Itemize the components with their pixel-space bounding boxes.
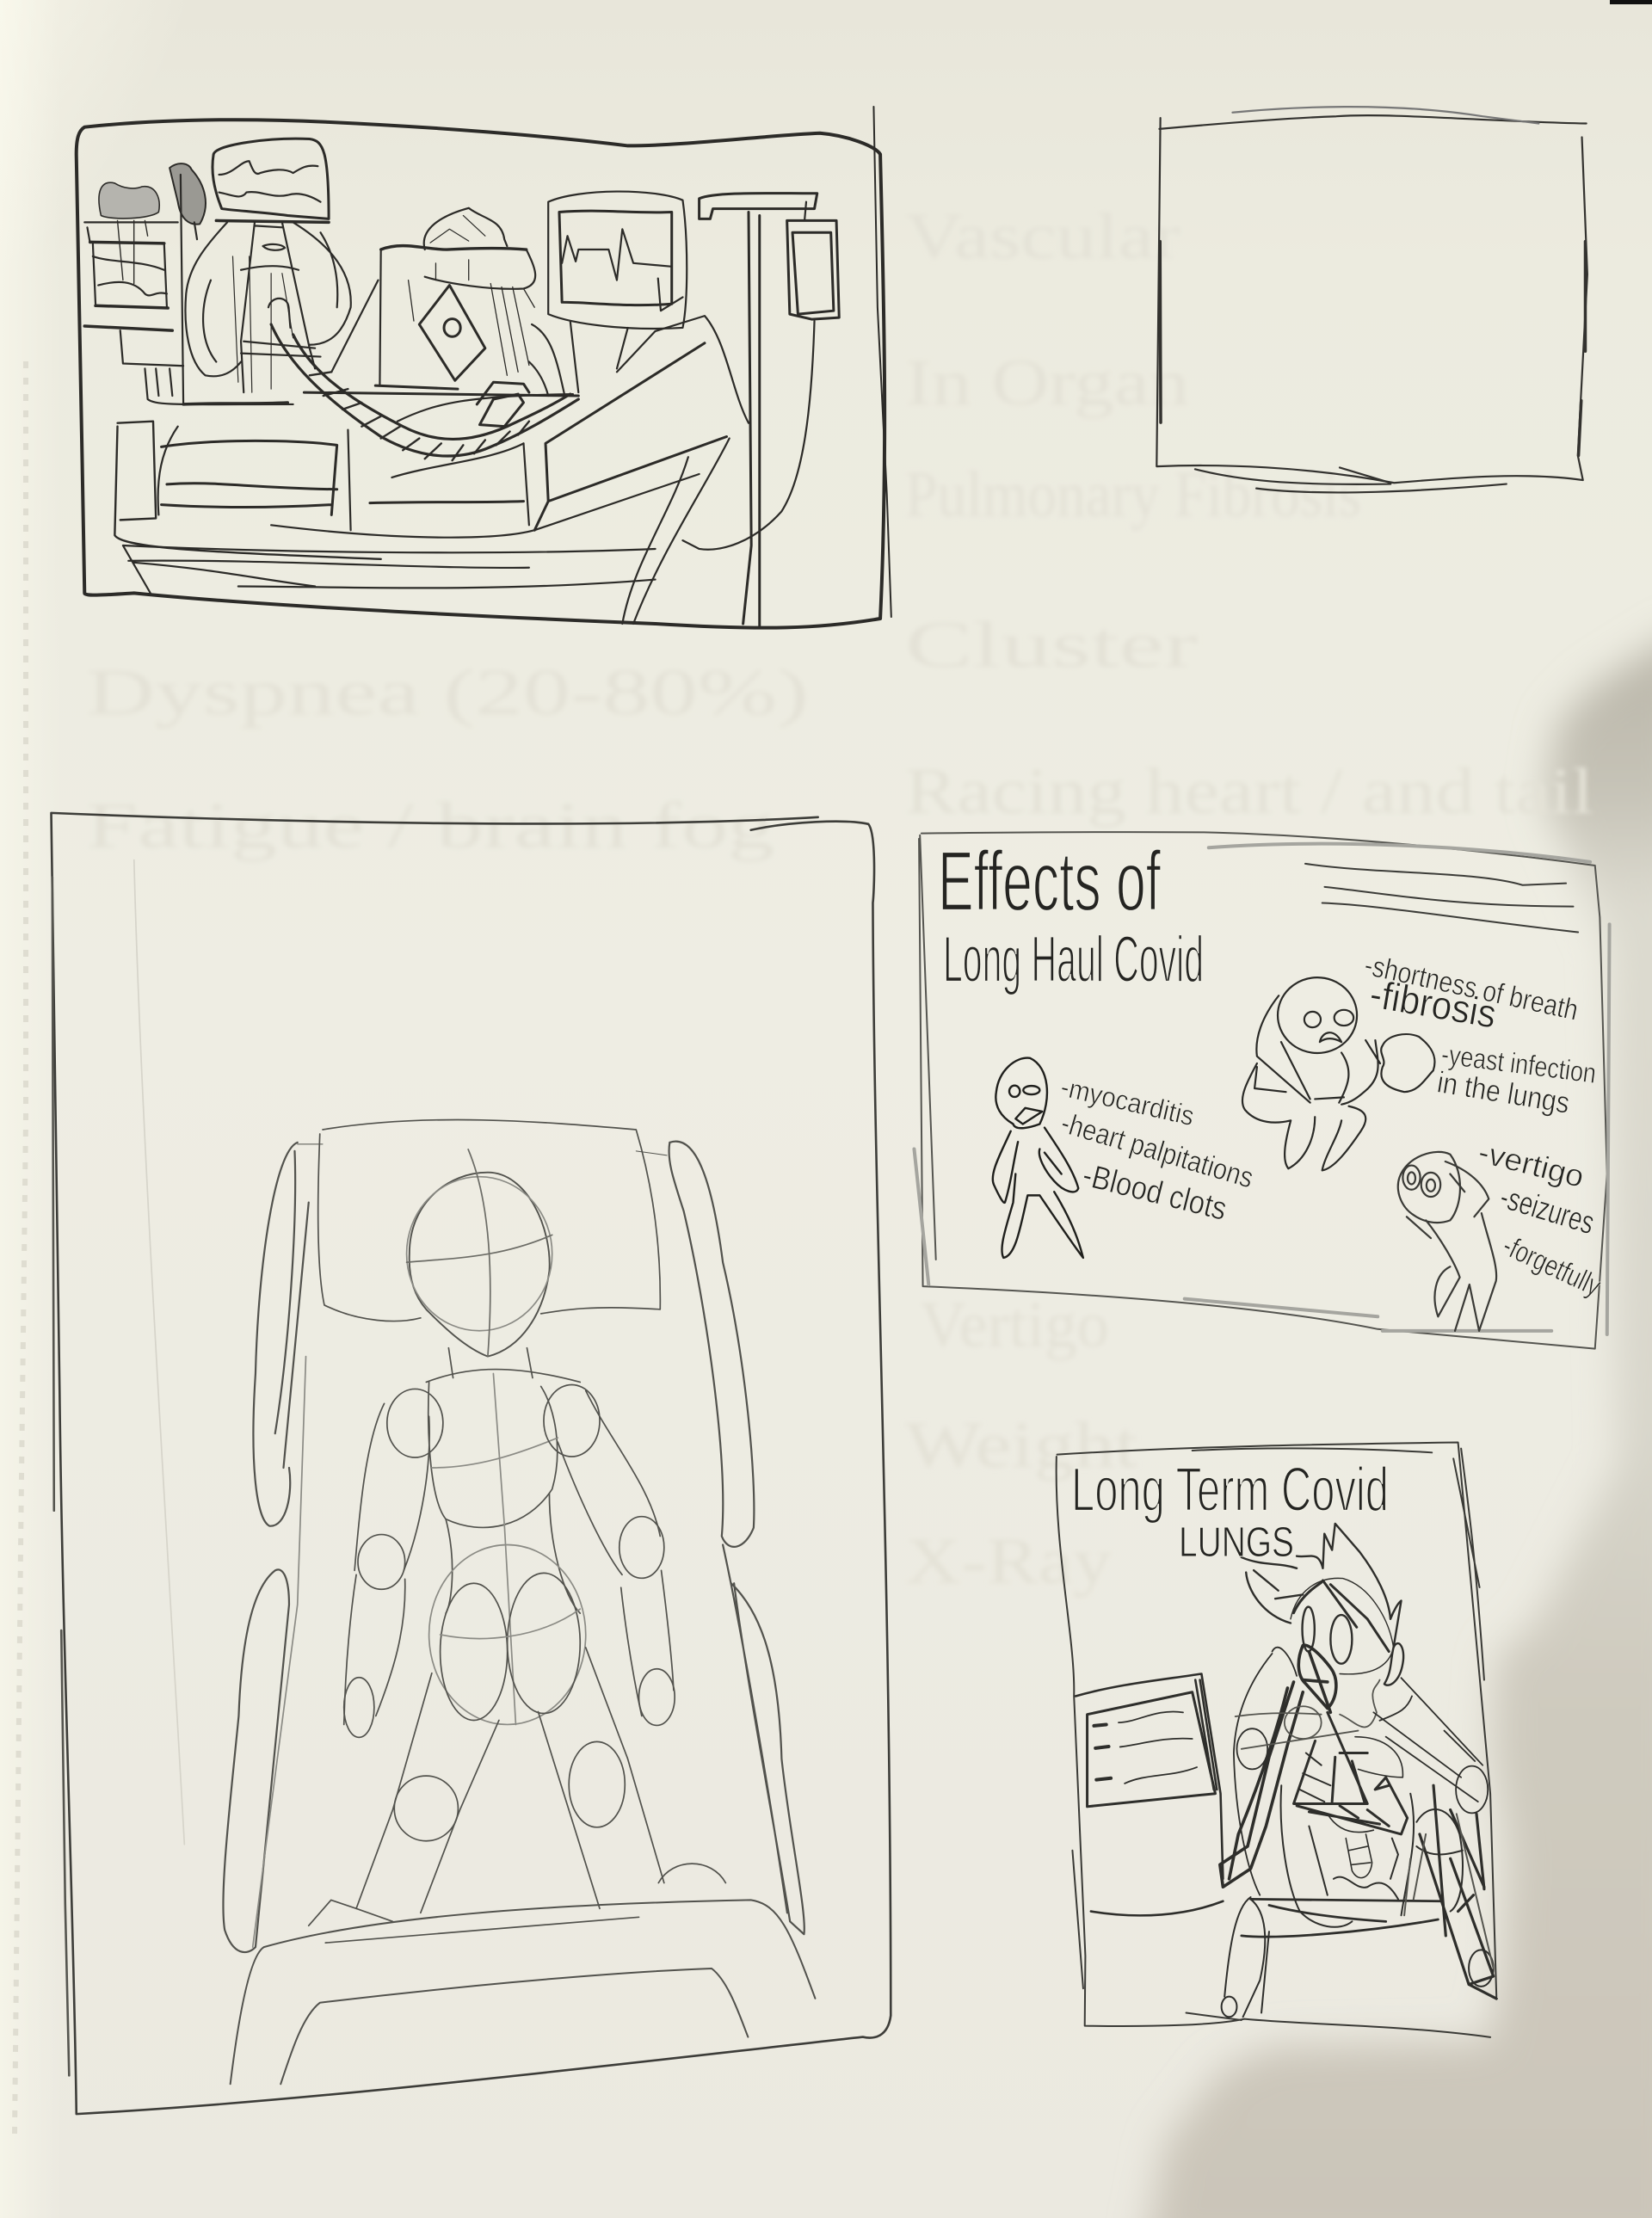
- frame: [919, 832, 1607, 1349]
- exposed ribcage and lungs: [1294, 1712, 1408, 1899]
- show-through text from reverse side: Vertigo: [920, 1289, 1109, 1361]
- panel: Long Term Covid Lungs: [1057, 1443, 1496, 2037]
- show-through text from reverse side: Cluster: [905, 609, 1198, 681]
- patient head and body under blanket: [304, 208, 578, 477]
- panel: Effects of Long Haul Covid: [914, 832, 1610, 1349]
- left equipment box: [84, 220, 293, 404]
- gown and lower body: [1222, 1785, 1496, 2017]
- phone clip: [477, 382, 529, 427]
- ventilator machine: [185, 220, 351, 392]
- IV pole and bag: [682, 194, 839, 627]
- oxygen bag: [99, 182, 159, 219]
- symptom list: heart: [1057, 1071, 1257, 1228]
- pelvis and legs: [356, 1545, 664, 1913]
- symptom list: neurological: -vertigo: [1475, 1134, 1587, 1194]
- heading: Long Term Covid LUNGS: LUNGS: [1179, 1519, 1294, 1566]
- breathing tube: [271, 324, 578, 460]
- heading: Effects of Long Haul Covid: [938, 834, 1204, 996]
- open mouth with tube: [1220, 1645, 1336, 1887]
- ECG monitor: [548, 192, 687, 392]
- show-through text from reverse side: X-Ray: [905, 1525, 1112, 1598]
- bed rails: [134, 860, 804, 1952]
- symptom list: heart: -Blood clots: [1079, 1157, 1230, 1228]
- show-through text from reverse side: Racing heart / and tail: [905, 755, 1593, 828]
- symptom list: neurological: [1475, 1134, 1606, 1303]
- headboard pillow: [318, 1119, 660, 1322]
- frame: [52, 813, 891, 2114]
- photo corner: [1610, 0, 1652, 4]
- frame: [77, 120, 885, 628]
- dark stand: [170, 163, 206, 403]
- headline lines: [1305, 864, 1578, 932]
- figure: neuro symptoms: [1398, 1152, 1496, 1331]
- figure: lung symptoms: [1242, 977, 1434, 1170]
- show-through text from reverse side: Dyspnea (20-80%): [86, 656, 809, 729]
- show-through text from reverse side: Weight: [905, 1409, 1137, 1482]
- heading: Effects of Long Haul Covid: Effects of: [938, 834, 1161, 928]
- perforation marks: [15, 361, 26, 2134]
- show-through text from reverse side: Fatigue / brain fog: [86, 790, 774, 862]
- symptom list: lungs: -yeast infection: [1439, 1038, 1598, 1089]
- symptom list: heart: -heart palpitations: [1057, 1106, 1257, 1195]
- head: [407, 1149, 552, 1357]
- heading: Long Term Covid LUNGS: [1071, 1456, 1389, 1566]
- cast shadow on the paper: [1144, 628, 1652, 2218]
- show-through text from reverse side: In Organ: [905, 347, 1189, 419]
- foot of bed: [231, 1864, 815, 2084]
- shoulder and arm joints: [344, 1384, 675, 1737]
- heading: Effects of Long Haul Covid: Long Haul Covid: [943, 923, 1204, 996]
- symptom list: lungs: -shortness of breath: [1361, 949, 1581, 1027]
- symptom list: lungs: -fibrosis: [1366, 971, 1500, 1037]
- symptom list: neurological: -seizures: [1495, 1179, 1599, 1241]
- figure: heart symptoms: [993, 1058, 1083, 1258]
- cloud: infected lung: [1381, 1034, 1434, 1092]
- show-through text from reverse side: Pulmonary Fibrosis: [905, 459, 1361, 531]
- panel: full body figure study: [52, 813, 891, 2114]
- symptom list: lungs: [1361, 949, 1598, 1120]
- symptom list: lungs: in the lungs: [1435, 1065, 1572, 1120]
- show-through text from reverse side: Vascular: [905, 200, 1180, 273]
- vital signs monitor: [213, 139, 329, 219]
- heading: Long Term Covid LUNGS: Long Term Covid: [1071, 1456, 1389, 1525]
- shoulders and arms: [1234, 1648, 1488, 1895]
- symptom list: heart: -myocarditis: [1057, 1071, 1197, 1131]
- torso: [426, 1348, 580, 1724]
- symptom list: neurological: -forgetfully: [1498, 1229, 1606, 1303]
- hospital bed: [114, 316, 749, 624]
- character hair and head: [1242, 1524, 1403, 1685]
- panel: empty frame: [1156, 107, 1587, 492]
- frame: [1057, 1443, 1496, 2037]
- panel: ICU bedside scene: [77, 107, 891, 628]
- clipboard / monitor with list: [1076, 1673, 1223, 1915]
- show-through text from reverse side: [86, 200, 1593, 1598]
